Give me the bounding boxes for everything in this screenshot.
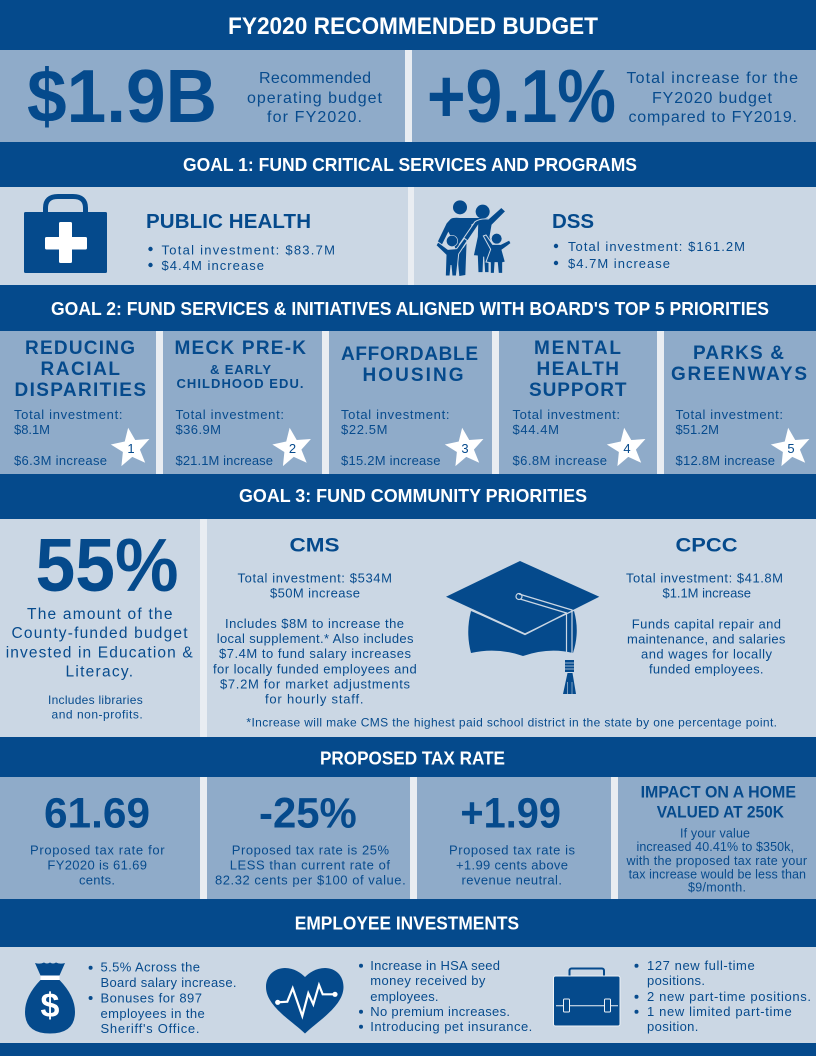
bullet list: salaries: Sheriff's Office. bbox=[100, 1021, 200, 1036]
figures: reducing racial disparities bbox=[14, 407, 122, 468]
bullet list: benefits: money received by bbox=[370, 973, 486, 988]
description: total increase bbox=[626, 70, 798, 126]
bullet list: DSS bbox=[554, 239, 745, 271]
text block: CMS details: Includes $8M to increase the bbox=[225, 616, 404, 631]
heading: affordable housing: AFFORDABLE bbox=[341, 344, 478, 365]
heading: proposed tax rate: PROPOSED TAX RATE bbox=[320, 747, 505, 768]
panel: affordable housing bbox=[329, 331, 492, 474]
text block: CPCC details bbox=[627, 617, 786, 677]
star badge 3 bbox=[443, 425, 487, 467]
figures: CMS: $50M increase bbox=[270, 586, 360, 601]
heading: meck pre-k: CHILDHOOD EDU. bbox=[176, 376, 304, 391]
description: -25%: LESS than current rate of bbox=[230, 857, 390, 872]
figures: parks and greenways: $51.2M bbox=[676, 422, 719, 437]
star badge 4 bbox=[605, 425, 649, 467]
figures: meck pre-k: $21.1M increase bbox=[176, 453, 273, 468]
heading: meck pre-k: MECK PRE-K bbox=[174, 338, 306, 359]
footnote: *Increase will make CMS the highest paid school district in the state by one percentage point. bbox=[246, 716, 777, 730]
title banner: FY2020 RECOMMENDED BUDGET bbox=[228, 13, 598, 40]
figures: meck pre-k bbox=[176, 407, 284, 468]
text block: CPCC details: maintenance, and salaries bbox=[627, 632, 786, 647]
bullet list: positions: positions. bbox=[647, 973, 705, 988]
description: impact on a home: $9/month. bbox=[688, 881, 746, 895]
icon: heart with pulse bbox=[266, 968, 344, 1034]
panel: CMS and CPCC bbox=[207, 519, 816, 737]
text block: CMS details: $7.2M for market adjustments bbox=[220, 677, 410, 692]
text block: CMS details bbox=[213, 616, 417, 707]
figures: affordable housing: $15.2M increase bbox=[341, 453, 440, 468]
panel: tax rate 61.69 bbox=[0, 777, 200, 899]
bullet list: salaries: 5.5% Across the bbox=[100, 960, 200, 975]
figures: affordable housing: $22.5M bbox=[341, 422, 388, 437]
description: education share: County-funded budget bbox=[12, 625, 188, 642]
heading: goal 1: GOAL 1: FUND CRITICAL SERVICES AND PROGRAMS bbox=[183, 154, 637, 175]
panel: mental health support bbox=[499, 331, 657, 474]
figures: CMS: Total investment: $534M bbox=[238, 571, 392, 586]
heading: public health: PUBLIC HEALTH bbox=[146, 210, 311, 233]
icon: money bag: $ bbox=[41, 987, 60, 1025]
description: education share: invested in Education & bbox=[6, 644, 193, 662]
figures: reducing racial disparities: $6.3M increase bbox=[14, 453, 107, 468]
description: +1.99 bbox=[449, 842, 576, 887]
heading: parks and greenways: GREENWAYS bbox=[671, 364, 807, 385]
big number: -25%: -25% bbox=[259, 790, 357, 838]
title banner bbox=[0, 0, 816, 50]
description: -25% bbox=[215, 842, 406, 887]
figures: mental health support bbox=[512, 407, 620, 468]
heading: goal 2: GOAL 2: FUND SERVICES & INITIATIVES ALIGNED WITH BOARD'S TOP 5 PRIORITIES bbox=[51, 298, 769, 319]
description: total increase: Total increase for the bbox=[626, 70, 798, 87]
bullet list: public health: $4.4M increase bbox=[162, 258, 264, 273]
figures: affordable housing bbox=[341, 407, 450, 468]
description: education share: The amount of the bbox=[27, 606, 172, 623]
description: +1.99: +1.99 cents above bbox=[456, 857, 568, 872]
bullet list: benefits: Increase in HSA seed bbox=[370, 958, 500, 973]
description: 61.69: FY2020 is 61.69 bbox=[47, 857, 147, 872]
figures: meck pre-k: Total investment: bbox=[176, 407, 284, 422]
icon: briefcase bbox=[554, 968, 620, 1026]
bullet list: salaries: Board salary increase. bbox=[100, 975, 236, 990]
description: impact on a home: with the proposed tax rate your bbox=[626, 854, 807, 868]
bullet list: benefits: No premium increases. bbox=[370, 1004, 510, 1019]
panel: total increase bbox=[412, 50, 816, 142]
icon: family bbox=[436, 200, 511, 276]
figures: CPCC: $1.1M increase bbox=[662, 586, 751, 601]
bullet list: salaries: Bonuses for 897 bbox=[100, 991, 202, 1006]
star badge 1 bbox=[109, 425, 153, 467]
note: libraries and non-profits: and non-profits. bbox=[52, 708, 143, 722]
star badge 5: 5 bbox=[787, 441, 795, 456]
star badge 3: 3 bbox=[461, 441, 469, 456]
text block: CMS details: for locally funded employees and bbox=[213, 661, 417, 676]
note: libraries and non-profits bbox=[48, 693, 143, 722]
heading: DSS: DSS bbox=[552, 210, 594, 233]
description: impact on a home: If your value bbox=[680, 827, 750, 841]
description: -25%: 82.32 cents per $100 of value. bbox=[215, 872, 406, 887]
star badge 4: 4 bbox=[623, 441, 631, 456]
heading: mental health support bbox=[529, 338, 627, 401]
heading: parks and greenways bbox=[671, 343, 807, 385]
heading: mental health support: SUPPORT bbox=[529, 380, 627, 401]
heading: reducing racial disparities bbox=[14, 338, 146, 401]
heading: mental health support: MENTAL bbox=[534, 338, 621, 359]
heading: goal 3: GOAL 3: FUND COMMUNITY PRIORITIES bbox=[239, 485, 587, 506]
heading: impact on a home: VALUED AT 250K bbox=[657, 803, 785, 822]
bullet list: salaries bbox=[89, 960, 236, 1036]
bullet list: positions: 1 new limited part-time bbox=[647, 1004, 792, 1019]
panel: tax rate +1.99 bbox=[417, 777, 611, 899]
bullet list: DSS: Total investment: $161.2M bbox=[568, 239, 745, 254]
big number: 61.69: 61.69 bbox=[44, 790, 150, 838]
panel: education share bbox=[0, 519, 200, 737]
heading: parks and greenways: PARKS & bbox=[693, 343, 784, 364]
star badge 5 bbox=[769, 425, 813, 467]
description: +1.99: Proposed tax rate is bbox=[449, 842, 576, 857]
heading: reducing racial disparities: REDUCING bbox=[25, 338, 135, 359]
description: 61.69: cents. bbox=[79, 872, 115, 887]
description: education share bbox=[6, 606, 193, 680]
figures: mental health support: Total investment: bbox=[512, 407, 620, 422]
panel: impact on a home bbox=[618, 777, 816, 899]
bullet list: positions bbox=[634, 958, 811, 1034]
text block: CMS details: for hourly staff. bbox=[265, 692, 364, 707]
figures: affordable housing: Total investment: bbox=[341, 407, 450, 422]
star badge 2: 2 bbox=[289, 441, 296, 456]
figures: parks and greenways: Total investment: bbox=[676, 407, 783, 422]
heading: affordable housing bbox=[341, 344, 478, 386]
bullet list: public health bbox=[148, 242, 335, 273]
heading: meck pre-k bbox=[174, 338, 306, 391]
heading: employee investments: EMPLOYEE INVESTMENTS bbox=[295, 913, 519, 934]
bullet list: benefits: employees. bbox=[370, 989, 438, 1004]
description: operating budget: operating budget bbox=[247, 90, 383, 107]
description: 61.69 bbox=[30, 842, 165, 887]
description: education share: Literacy. bbox=[66, 664, 133, 680]
description: impact on a home: increased 40.41% to $350k, bbox=[636, 840, 794, 854]
panel: reducing racial disparities bbox=[0, 331, 156, 474]
heading: impact on a home bbox=[641, 783, 796, 822]
description: operating budget bbox=[247, 70, 383, 126]
description: operating budget: for FY2020. bbox=[267, 109, 362, 126]
panel: DSS bbox=[414, 187, 816, 285]
bullet list: benefits: Introducing pet insurance. bbox=[370, 1019, 532, 1034]
figures: reducing racial disparities: Total investment: bbox=[14, 407, 122, 422]
text block: CPCC details: funded employees. bbox=[649, 662, 764, 677]
description: total increase: compared to FY2019. bbox=[628, 109, 797, 126]
star badge 2 bbox=[270, 425, 314, 467]
text block: CPCC details: Funds capital repair and bbox=[632, 617, 781, 632]
description: +1.99: revenue neutral. bbox=[462, 872, 562, 887]
description: impact on a home: tax increase would be less than bbox=[629, 868, 806, 882]
figures: CPCC: Total investment: $41.8M bbox=[626, 571, 783, 586]
figures: mental health support: $44.4M bbox=[512, 422, 559, 437]
bullet list: positions: 127 new full-time bbox=[647, 958, 755, 973]
figures: parks and greenways: $12.8M increase bbox=[676, 453, 775, 468]
icon: medical bag bbox=[24, 196, 107, 273]
figures: mental health support: $6.8M increase bbox=[512, 453, 607, 468]
panel: parks and greenways bbox=[664, 331, 816, 474]
text block: CMS details: local supplement.* Also includes bbox=[217, 631, 414, 646]
heading: CMS: CMS bbox=[290, 536, 340, 557]
figures: CPCC bbox=[626, 571, 783, 601]
big number: +1.99: +1.99 bbox=[460, 790, 561, 838]
bullet list: positions: position. bbox=[647, 1019, 698, 1034]
description: 61.69: Proposed tax rate for bbox=[30, 842, 165, 857]
panel: meck pre-k bbox=[163, 331, 322, 474]
text block: CMS details: $7.4M to fund salary increases bbox=[219, 646, 412, 661]
bullet list: DSS: $4.7M increase bbox=[568, 256, 670, 271]
big number: $1.9B: $1.9B bbox=[27, 54, 217, 138]
description: total increase: FY2020 budget bbox=[652, 90, 773, 107]
figures: meck pre-k: $36.9M bbox=[176, 422, 221, 437]
icon: money bag bbox=[25, 962, 75, 1034]
heading: mental health support: HEALTH bbox=[536, 359, 619, 380]
icon: graduation cap bbox=[446, 561, 599, 694]
heading: meck pre-k: & EARLY bbox=[210, 362, 271, 377]
description: operating budget: Recommended bbox=[259, 70, 371, 87]
bullet list: positions: 2 new part-time positions. bbox=[647, 989, 811, 1004]
panel: public health bbox=[0, 187, 408, 285]
bullet list: public health: Total investment: $83.7M bbox=[162, 242, 335, 258]
note: libraries and non-profits: Includes libraries bbox=[48, 693, 143, 707]
bullet list: salaries: employees in the bbox=[100, 1006, 205, 1021]
big number: +9.1%: +9.1% bbox=[427, 54, 616, 138]
big number: 55%: 55% bbox=[36, 523, 178, 607]
figures: reducing racial disparities: $8.1M bbox=[14, 422, 50, 437]
heading: reducing racial disparities: RACIAL bbox=[40, 359, 120, 380]
heading: impact on a home: IMPACT ON A HOME bbox=[641, 783, 796, 802]
star badge 1: 1 bbox=[127, 441, 135, 456]
description: impact on a home bbox=[626, 827, 807, 895]
heading: CPCC: CPCC bbox=[676, 536, 738, 557]
text block: CPCC details: and wages for locally bbox=[641, 647, 772, 662]
panel: employee investments bbox=[0, 947, 816, 1043]
heading: reducing racial disparities: DISPARITIES bbox=[14, 380, 146, 401]
bullet list: benefits bbox=[359, 958, 532, 1034]
description: -25%: Proposed tax rate is 25% bbox=[232, 842, 389, 857]
panel: recommended operating budget bbox=[0, 50, 405, 142]
heading: affordable housing: HOUSING bbox=[362, 365, 464, 386]
figures: parks and greenways bbox=[676, 407, 783, 468]
figures: CMS bbox=[238, 571, 392, 601]
panel: tax rate -25% bbox=[207, 777, 410, 899]
